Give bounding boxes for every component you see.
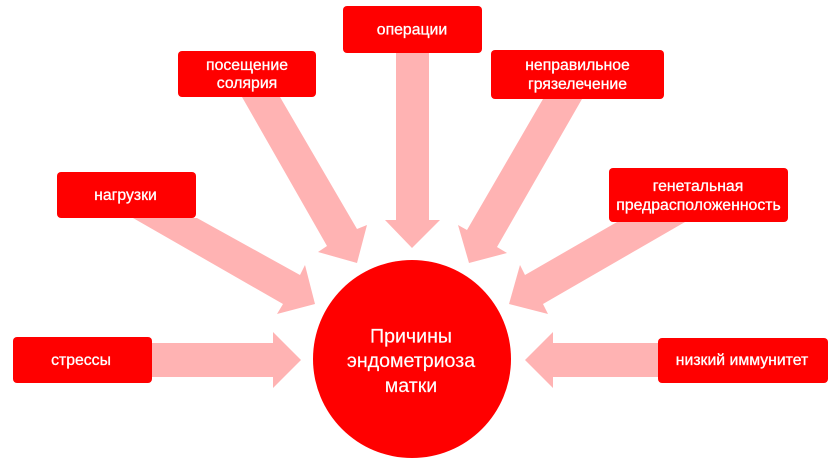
arrow: low immunity to center <box>525 332 658 388</box>
box: solarium <box>178 51 316 97</box>
arrow: operations to center <box>385 53 440 248</box>
arrow: solarium to center <box>242 97 367 263</box>
box: solarium: посещение <box>206 57 288 74</box>
box: genetic predisposition <box>609 168 788 222</box>
box: low immunity <box>658 338 828 383</box>
arrow: stress to center <box>152 332 301 388</box>
center circle: матки <box>385 375 437 397</box>
box: genetic predisposition: генетальная <box>653 178 743 195</box>
box: load <box>57 172 196 218</box>
arrow: genetic predisposition to center <box>509 222 685 314</box>
center circle: Причины <box>370 326 452 348</box>
box: genetic predisposition: предрасположенность <box>616 197 781 214</box>
box: solarium: солярия <box>217 75 277 92</box>
box: operations <box>343 6 482 53</box>
center circle: эндометриоза <box>347 350 475 372</box>
arrow: load to center <box>133 218 315 314</box>
center circle <box>313 260 511 458</box>
box: operations: операции <box>377 22 447 38</box>
box: improper mud therapy <box>491 50 664 99</box>
box: improper mud therapy: неправильное <box>525 57 630 74</box>
arrow: improper mud therapy to center <box>458 99 582 263</box>
box: stress <box>13 337 152 383</box>
box: load: нагрузки <box>94 187 157 204</box>
box: stress: стрессы <box>51 352 111 369</box>
box: low immunity: низкий иммунитет <box>676 352 808 369</box>
box: improper mud therapy: грязелечение <box>528 76 627 93</box>
